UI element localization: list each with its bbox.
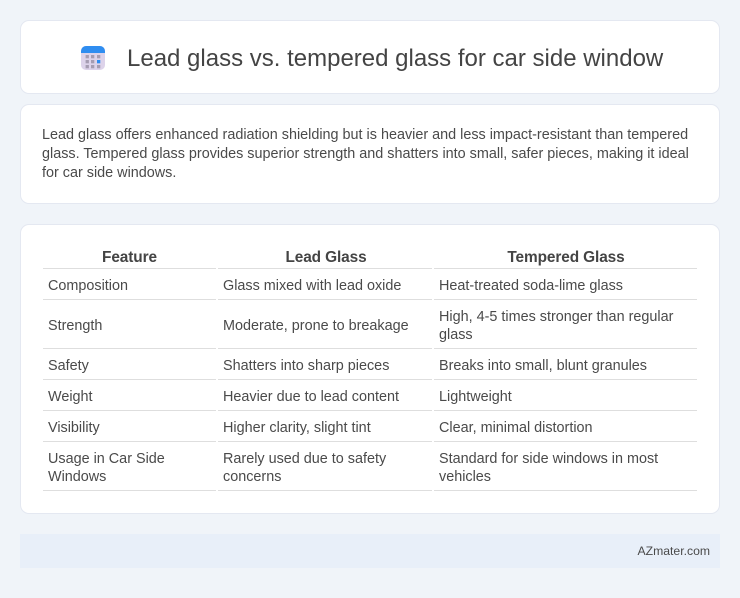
- text: Shatters into sharp pieces: [223, 358, 389, 374]
- row: Safety: Safety: [48, 358, 89, 374]
- text: Standard for side windows in most: [439, 451, 658, 467]
- footer credit: AZmater.com: [638, 544, 710, 558]
- text: Lightweight: [439, 389, 512, 405]
- summary text: Lead glass offers enhanced radiation shielding but is heavier and less impact-resistant than tempered: [42, 127, 688, 143]
- text: Heat-treated soda-lime glass: [439, 278, 623, 294]
- text: Higher clarity, slight tint: [223, 420, 371, 436]
- text: Breaks into small, blunt granules: [439, 358, 647, 374]
- text: Rarely used due to safety: [223, 451, 386, 467]
- panel: title card: [20, 20, 720, 94]
- header: Tempered Glass: Tempered Glass: [507, 249, 625, 266]
- row: Usage in Car Side Windows: Windows: [48, 469, 106, 485]
- text: High, 4-5 times stronger than regular: [439, 309, 673, 325]
- text: Glass mixed with lead oxide: [223, 278, 401, 294]
- text: Heavier due to lead content: [223, 389, 399, 405]
- text: Moderate, prone to breakage: [223, 318, 409, 334]
- title: Lead glass vs. tempered glass for car side window: [127, 45, 663, 72]
- text: concerns: [223, 469, 281, 485]
- summary text: glass. Tempered glass provides superior strength and shatters into small, safer pieces, making it ideal: [42, 146, 689, 162]
- panel: summary: [20, 104, 720, 204]
- footer bar: [20, 534, 720, 568]
- row: Composition: Composition: [48, 278, 128, 294]
- header: Lead Glass: Lead Glass: [285, 249, 367, 266]
- row: Weight: Weight: [48, 389, 93, 405]
- icon: calendar app: [81, 46, 105, 70]
- text: glass: [439, 327, 473, 343]
- row: Strength: Strength: [48, 318, 102, 334]
- text: vehicles: [439, 469, 491, 485]
- header: Feature: Feature: [102, 249, 157, 266]
- panel: comparison table: [20, 224, 720, 514]
- row: Usage in Car Side Windows: [48, 451, 165, 485]
- row: Usage in Car Side Windows: Usage in Car Side: [48, 451, 165, 467]
- summary text: for car side windows.: [42, 165, 176, 181]
- text: Clear, minimal distortion: [439, 420, 593, 436]
- row: Visibility: Visibility: [48, 420, 100, 436]
- summary text: [42, 127, 689, 181]
